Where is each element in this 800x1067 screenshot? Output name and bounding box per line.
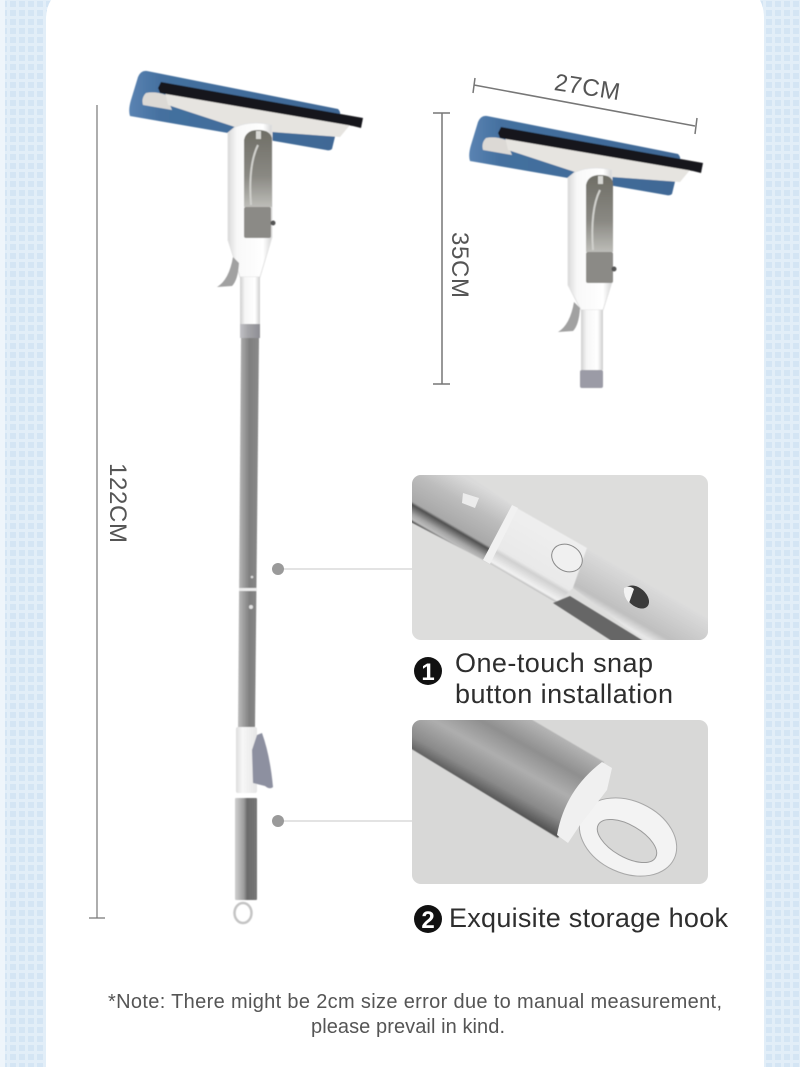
- badge 2: [414, 905, 442, 934]
- dimension line: [89, 105, 105, 918]
- squeegee plate: [505, 137, 690, 182]
- mop head detail: [469, 116, 703, 388]
- connector dot: [272, 563, 284, 575]
- handle body: [568, 168, 612, 310]
- snap button: [551, 544, 583, 572]
- button hole: [628, 586, 649, 608]
- connector line: [278, 820, 412, 822]
- small square mark: [462, 493, 479, 508]
- lower grip: [235, 798, 257, 900]
- end collar: [580, 370, 603, 388]
- note line 2: please prevail in kind.: [311, 1016, 505, 1038]
- connector line: [278, 568, 412, 570]
- dark lower strip: [552, 596, 642, 640]
- valve highlight: [256, 131, 261, 139]
- badge number: 1: [421, 659, 435, 686]
- collar: [240, 324, 260, 338]
- caption: one-touch snap: One-touch snap: [455, 648, 653, 678]
- hole highlight: [624, 587, 634, 603]
- panel background: [412, 475, 708, 640]
- white lower collar: [236, 727, 257, 793]
- height dimension 122CM: [89, 105, 131, 918]
- dimension label: 35CM: [446, 232, 473, 298]
- height dimension 35CM: [433, 113, 473, 384]
- dimension label: 27CM: [552, 69, 622, 106]
- connector to snap button detail: [272, 563, 412, 575]
- storage ring: [234, 903, 252, 923]
- badge 1: [414, 657, 442, 686]
- tube section 1: [412, 475, 510, 561]
- lower trigger: [252, 733, 273, 788]
- connector to hook detail: [272, 815, 412, 827]
- dimension line: [433, 113, 450, 384]
- tube: [405, 715, 604, 838]
- note line 1: *Note: There might be 2cm size error due to manual measurement,: [108, 991, 722, 1013]
- panel: storage hook close-up: [405, 715, 708, 891]
- handle body: [228, 123, 272, 277]
- white end cap: [557, 762, 612, 843]
- handle neck: [581, 310, 603, 370]
- connector dot: [272, 815, 284, 827]
- grey latch block: [586, 252, 613, 283]
- caption: button installation: button installation: [455, 679, 673, 709]
- pole button: [251, 576, 253, 578]
- foam inner: [482, 137, 512, 155]
- pale strip on left edge: [0, 0, 5, 1067]
- storage ring inner: [596, 819, 658, 863]
- mop pad: [129, 71, 340, 150]
- handle window: [244, 130, 272, 207]
- grey latch block: [244, 207, 271, 238]
- squeegee plate: [165, 92, 350, 137]
- side button: [270, 220, 276, 226]
- pole joint: [239, 588, 257, 591]
- mop pad: [469, 116, 680, 195]
- tube inside window: [592, 190, 600, 250]
- handle neck: [240, 277, 260, 325]
- width dimension 27CM: [473, 69, 697, 134]
- upper pole: [238, 338, 259, 727]
- pole hole: [249, 605, 253, 609]
- tube section 2: [487, 507, 587, 603]
- trigger: [558, 302, 580, 332]
- dimension label: 122CM: [104, 463, 131, 543]
- caption: exquisite storage hook: Exquisite storage hook: [449, 903, 728, 933]
- panel: snap button close-up: [405, 470, 712, 645]
- badge circle: [414, 657, 442, 685]
- rubber blade: [158, 82, 363, 128]
- full-length spray mop: [129, 71, 363, 923]
- side button: [612, 266, 616, 272]
- badge number: 2: [421, 907, 435, 934]
- foam inner: [142, 92, 172, 110]
- tube inside window: [250, 145, 258, 205]
- storage ring outer: [578, 797, 678, 877]
- dimension line: [473, 78, 697, 134]
- white ring: [483, 505, 518, 564]
- tube section 3: [573, 558, 708, 640]
- trigger: [217, 257, 239, 287]
- handle window: [586, 175, 613, 252]
- valve highlight: [598, 176, 603, 184]
- rubber blade: [498, 127, 703, 173]
- panel background: [412, 720, 708, 884]
- badge circle: [414, 905, 442, 933]
